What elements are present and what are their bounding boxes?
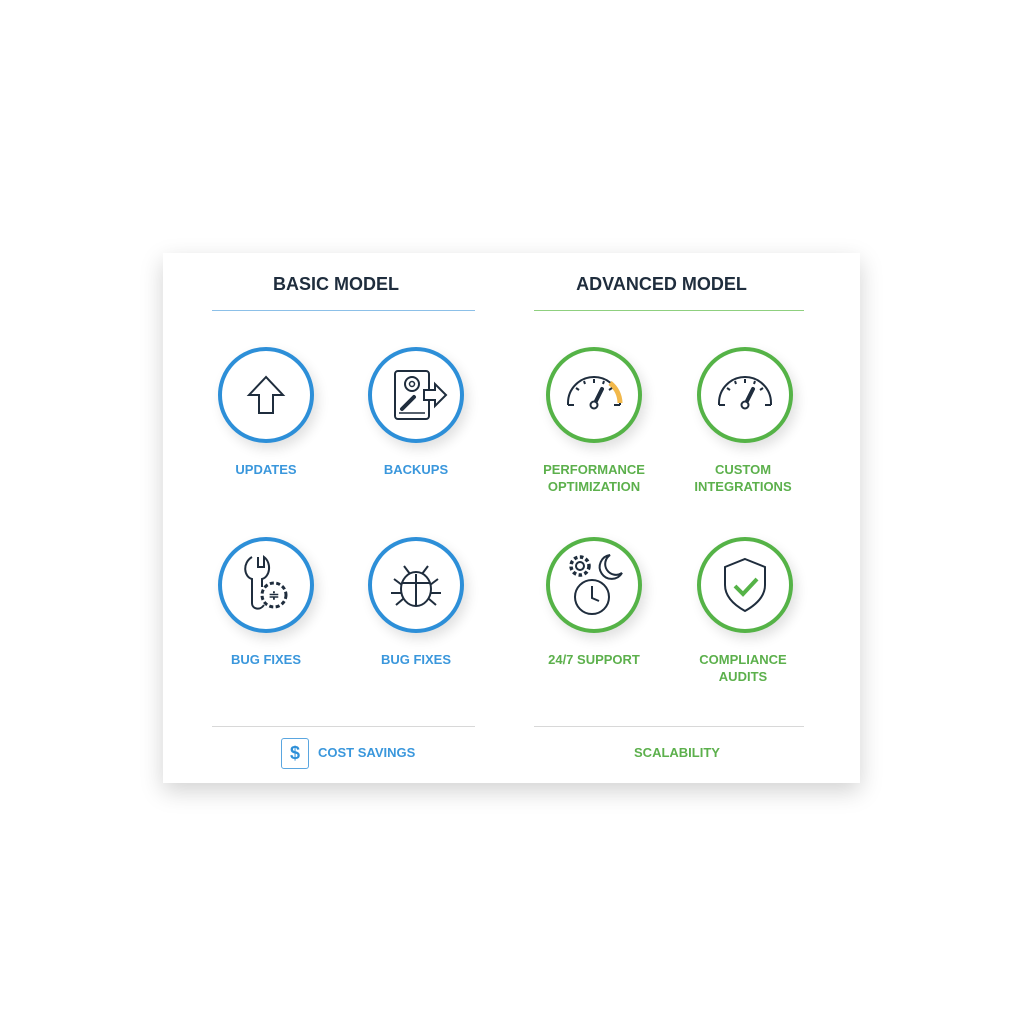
heading: basic model: BASIC MODEL [273, 274, 399, 294]
footer: cost savings: COST SAVINGS [318, 745, 415, 760]
icon: bug fixes wrench: ≑ [269, 588, 279, 603]
icon: custom integrations [697, 347, 793, 443]
icon: dollar: $ [290, 743, 300, 763]
icon: bug [368, 537, 464, 633]
icon: performance [546, 347, 642, 443]
icon: compliance shield [697, 537, 793, 633]
label: performance optimization: OPTIMIZATION [548, 479, 640, 494]
label: custom integrations [694, 462, 792, 494]
label: bug fixes 1: BUG FIXES [231, 652, 301, 667]
label: performance optimization [543, 462, 645, 494]
icon: bug fixes wrench [218, 537, 314, 633]
label: bug fixes 2: BUG FIXES [381, 652, 451, 667]
label: 24/7 support: 24/7 SUPPORT [548, 652, 640, 667]
card panel [163, 253, 860, 783]
icon: 24/7 support [546, 537, 642, 633]
icon: updates [218, 347, 314, 443]
icon: backups [368, 347, 464, 443]
label: performance optimization: PERFORMANCE [543, 462, 645, 477]
heading: advanced model: ADVANCED MODEL [576, 274, 747, 294]
footer: cost savings [281, 738, 415, 769]
label: compliance audits: COMPLIANCE [699, 652, 787, 667]
label: updates: UPDATES [235, 462, 297, 477]
footer: scalability: SCALABILITY [634, 745, 720, 760]
label: custom integrations: INTEGRATIONS [694, 479, 792, 494]
label: backups: BACKUPS [384, 462, 448, 477]
label: compliance audits: AUDITS [719, 669, 767, 684]
label: custom integrations: CUSTOM [715, 462, 771, 477]
icon: dollar [281, 738, 309, 769]
label: compliance audits [699, 652, 787, 684]
